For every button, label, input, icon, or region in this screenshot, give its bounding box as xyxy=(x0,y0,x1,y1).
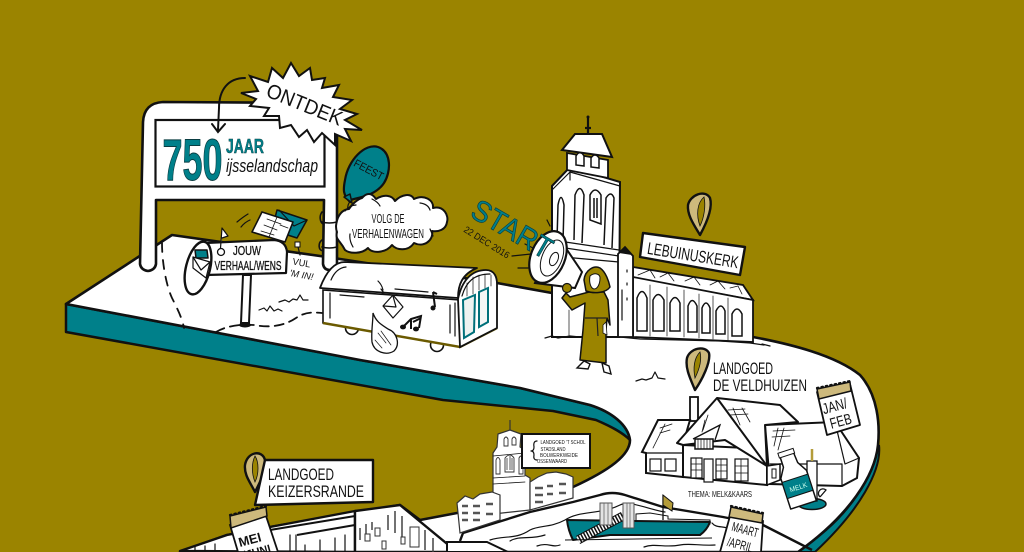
chimney xyxy=(690,397,698,421)
location pin: keizersrande xyxy=(245,453,265,492)
building left long xyxy=(180,511,355,552)
tower roof xyxy=(562,134,612,157)
cloud: volg de verhalenwagen: VERHALENWAGEN xyxy=(352,226,424,241)
mailbox flag xyxy=(220,228,228,255)
town label: OSSENWAARD xyxy=(537,459,567,465)
balloon: feest: FEEST xyxy=(351,158,386,183)
sign frame xyxy=(140,102,337,271)
church tower xyxy=(552,167,620,337)
wagon body xyxy=(323,290,460,347)
teal road edge: right xyxy=(796,445,879,552)
ship hull xyxy=(567,520,710,540)
monk hand and belt xyxy=(562,284,572,292)
mailbox board xyxy=(205,240,287,275)
arrow to sign xyxy=(212,78,245,132)
town label: STADSLAND xyxy=(540,447,566,453)
left house xyxy=(642,420,690,477)
label: lebuinuskerk xyxy=(640,233,745,275)
rope on post xyxy=(319,212,337,251)
wagon end wall xyxy=(458,270,497,347)
speech bubble xyxy=(372,313,397,353)
entrance sign xyxy=(140,102,337,271)
white road xyxy=(66,235,879,552)
location pin: lebuinuskerk xyxy=(688,194,711,235)
church windows xyxy=(637,292,742,336)
vul 'm in note: 'M IN! xyxy=(289,268,315,283)
candle holder xyxy=(798,498,826,510)
label: lebuinuskerk: LEBUINUSKERK xyxy=(646,239,740,272)
cloud: volg de verhalenwagen xyxy=(336,194,447,253)
750 number: 750 xyxy=(162,128,222,193)
monk hood xyxy=(584,267,610,293)
open book xyxy=(237,212,293,242)
start date: 22 DEC 2016 xyxy=(461,224,511,261)
envelope behind book xyxy=(272,210,307,238)
town label xyxy=(522,434,590,468)
side annex xyxy=(767,464,780,485)
label: landgoed de veldhuizen: LANDGOED xyxy=(713,359,773,378)
church grass xyxy=(545,336,770,346)
mailbox post xyxy=(241,275,251,323)
jetty pillars xyxy=(600,503,612,525)
wagon roof xyxy=(320,262,477,298)
ship xyxy=(565,495,712,540)
river waves xyxy=(490,504,727,547)
monk robe xyxy=(562,292,610,363)
wagon doors xyxy=(463,295,475,338)
farmhouse xyxy=(642,397,859,486)
building right gable xyxy=(355,505,457,552)
jouw: JOUW xyxy=(233,243,262,258)
location pin: veldhuizen xyxy=(687,348,709,390)
flying envelope xyxy=(383,295,403,318)
calendar: mei juni: MEI xyxy=(237,529,263,550)
mail in box xyxy=(193,250,210,278)
town label: BOLWERKWEIDE xyxy=(540,453,578,459)
barn xyxy=(765,422,859,486)
grass tuft near farm xyxy=(636,372,665,381)
music notes xyxy=(403,316,421,329)
label: landgoed de veldhuizen xyxy=(713,359,807,395)
tower belfry xyxy=(567,153,608,178)
main roof xyxy=(677,398,798,466)
verhaal/wens: VERHAAL/WENS xyxy=(214,259,282,273)
mailbox xyxy=(180,228,287,328)
tower windows xyxy=(557,188,614,248)
dashed route xyxy=(162,243,322,332)
town label: LANDGOED 'T SCHOL xyxy=(540,440,586,446)
ship flag xyxy=(662,495,664,520)
calendar: maart april xyxy=(720,506,763,552)
label: landgoed keizersrande: LANDGOED xyxy=(268,465,334,484)
megaphone xyxy=(512,220,582,288)
burst: ontdek xyxy=(241,63,362,145)
monk with megaphone xyxy=(512,220,611,374)
lebuinus church xyxy=(545,116,770,346)
grass tufts xyxy=(259,295,308,311)
start heading: START xyxy=(465,193,558,266)
calendar: jan feb: FEB xyxy=(828,411,854,433)
milk bottle and candle xyxy=(773,447,826,510)
main house wall xyxy=(683,445,767,485)
label: landgoed keizersrande: KEIZERSRANDE xyxy=(268,482,364,501)
church nave wall xyxy=(633,277,753,342)
right town houses xyxy=(530,472,573,510)
calendar: jan feb: JAN/ xyxy=(821,395,850,418)
vul 'm in note: VUL xyxy=(292,257,311,271)
teal road edge: left xyxy=(66,304,630,440)
monk feet xyxy=(577,361,611,374)
wagon wheels xyxy=(346,322,358,334)
burst: ontdek: ONTDEK xyxy=(263,79,346,131)
cloud: volg de verhalenwagen: VOLG DE xyxy=(372,211,405,226)
church stair turret xyxy=(618,247,633,337)
mailbox opening xyxy=(180,239,216,297)
river bank line xyxy=(460,493,812,550)
label: landgoed de veldhuizen: DE VELDHUIZEN xyxy=(713,376,807,395)
small town xyxy=(457,420,573,533)
theme caption: THEMA: MELK&KAARS xyxy=(688,489,752,499)
tower spire xyxy=(585,118,591,134)
calendar: maart april: MAART xyxy=(730,519,760,540)
house windows xyxy=(691,458,748,482)
dormer window xyxy=(695,439,713,449)
balloon: feest xyxy=(344,146,389,217)
church nave roof xyxy=(633,267,753,300)
vul 'm in note xyxy=(289,242,315,283)
keizersrande buildings xyxy=(180,505,508,552)
calendar: mei juni xyxy=(230,506,278,552)
calendar: jan feb xyxy=(817,381,860,435)
small tower xyxy=(493,420,530,514)
candle xyxy=(807,461,817,501)
sign panel xyxy=(156,120,324,186)
black roof building xyxy=(447,542,508,552)
story wagon xyxy=(320,262,497,353)
ijsselandschap: ijsselandschap xyxy=(226,156,318,176)
left town houses xyxy=(457,492,500,533)
milk bottle: MELK xyxy=(789,482,809,494)
monk face xyxy=(590,274,600,289)
jaar: JAAR xyxy=(226,136,264,158)
label: landgoed keizersrande xyxy=(255,460,373,505)
jetty stairs xyxy=(578,516,623,540)
ship superstructure xyxy=(636,513,710,524)
